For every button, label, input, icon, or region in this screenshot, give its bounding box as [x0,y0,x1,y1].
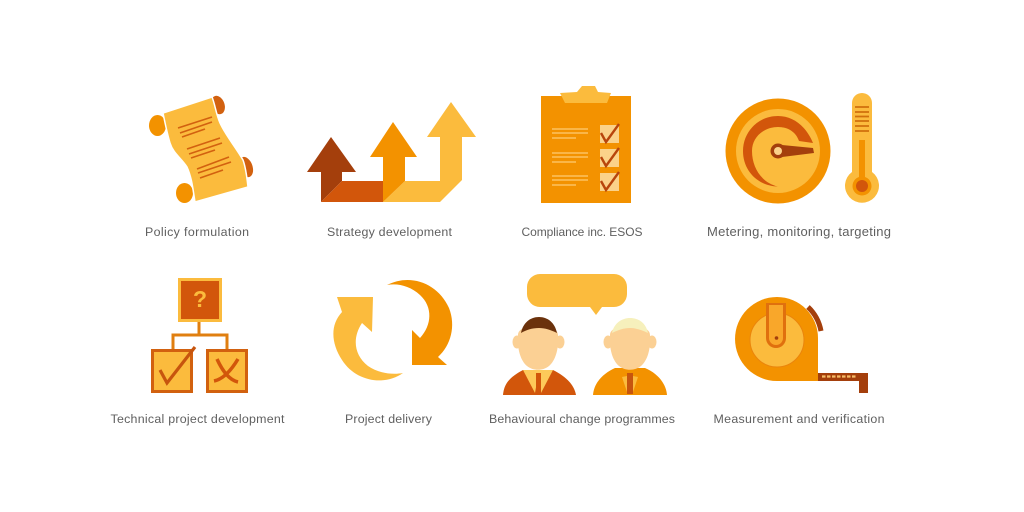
icon: tape measure [735,297,868,393]
panel: project delivery [333,280,452,426]
panel: technical project development [110,280,285,426]
icon: decision tree [152,280,246,392]
icon: scroll [149,94,256,203]
icon: speech bubble [527,274,627,315]
label: metering: Metering, monitoring, targeting [707,224,891,239]
icon: rising arrows [307,102,476,202]
panel: metering [707,93,891,239]
label: project delivery: Project delivery [345,412,433,426]
icon: clipboard [541,86,631,203]
label: strategy development: Strategy development [327,225,453,239]
icon: circular arrows [333,280,452,380]
label: behavioural change: Behavioural change programmes [489,412,675,426]
panel: behavioural change [489,274,675,426]
label: compliance: Compliance inc. ESOS [522,225,642,239]
panel: policy formulation [145,94,256,239]
icon: gauge [726,98,830,204]
panel: measurement and verification [714,297,885,426]
icon: person one [503,317,576,395]
panel: strategy development [307,102,476,239]
icon: decision tree: ? [193,286,207,312]
icon: thermometer [845,93,879,203]
panel: compliance [522,86,642,239]
label: measurement and verification: Measurement and verification [714,412,885,426]
label: policy formulation: Policy formulation [145,225,249,239]
icon: person two [593,318,667,395]
label: technical project development: Technical project development [110,412,285,426]
